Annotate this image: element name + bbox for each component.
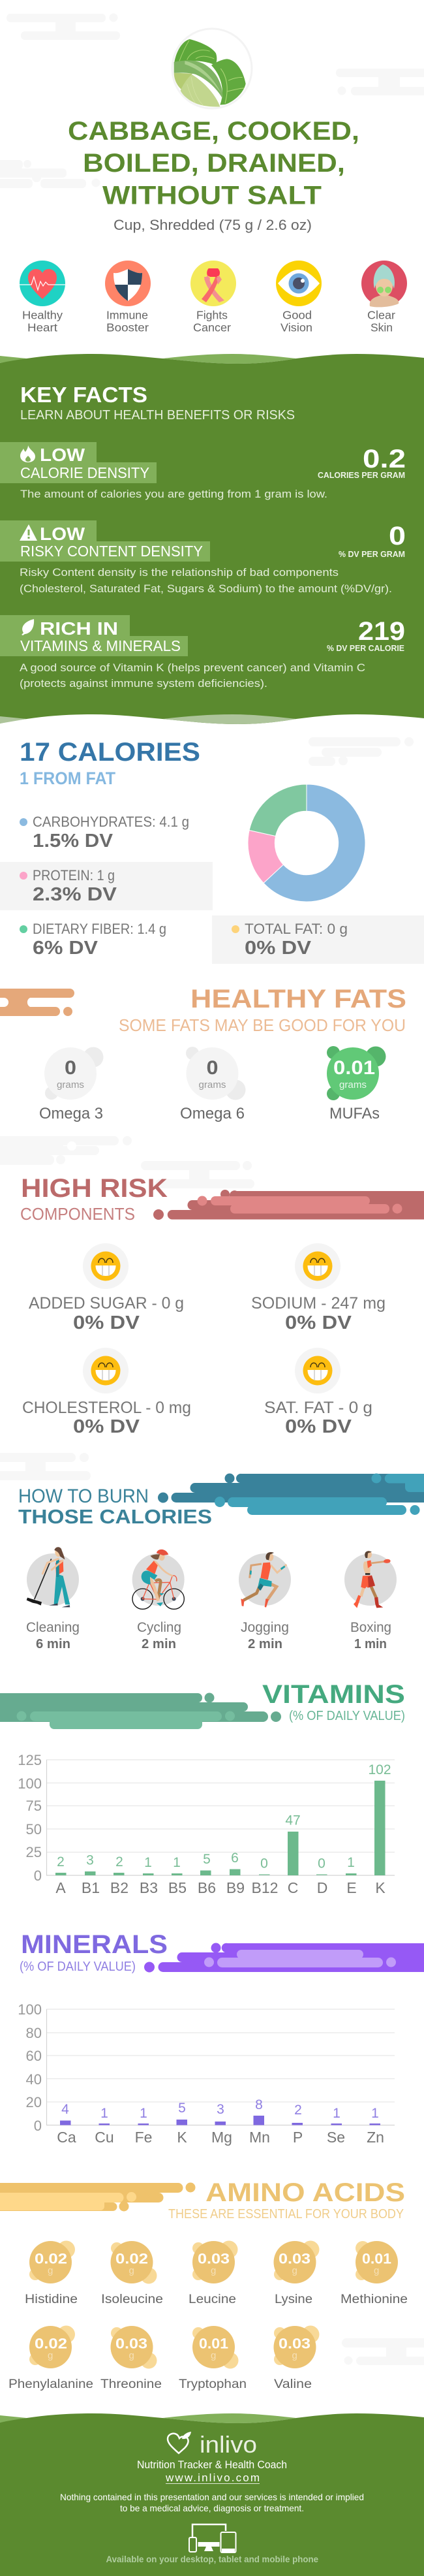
subheading: SOME FATS MAY BE GOOD FOR YOU xyxy=(119,1015,406,1035)
panel: footer xyxy=(0,2413,424,2576)
amino: phenylalanine: g xyxy=(48,2350,53,2361)
header decoration xyxy=(0,2182,196,2211)
bar chart: minerals: 1 xyxy=(333,2106,341,2121)
header decoration xyxy=(0,1693,281,1729)
benefit: fights cancer xyxy=(190,261,236,334)
bar chart: vitamins: 1 xyxy=(144,1855,152,1870)
heading: MINERALS xyxy=(21,1930,168,1959)
fact: risky content density: Risky Content density is the relationship of bad components xyxy=(20,566,339,579)
panel: minerals xyxy=(18,1930,424,2146)
fact: rich in vitamins and minerals: (protects against immune system deficiencies). xyxy=(20,677,267,690)
exercise: cleaning: Cleaning xyxy=(26,1620,80,1635)
fact: rich in vitamins and minerals: VITAMINS & MINERALS xyxy=(20,637,181,654)
background cloud: top right xyxy=(336,69,424,95)
row: dietary fiber xyxy=(20,921,166,959)
cabbage inner heart xyxy=(174,73,192,89)
background cloud: high risk right xyxy=(141,1161,254,1188)
fact: calorie density: CALORIES PER GRAM xyxy=(318,470,405,480)
exercise: cycling xyxy=(132,1550,185,1651)
background cloud: calories xyxy=(309,737,414,766)
bar chart: vitamins: 2 xyxy=(57,1854,65,1869)
header decoration xyxy=(153,1190,424,1220)
subheading: THESE ARE ESSENTIAL FOR YOUR BODY xyxy=(168,2207,404,2221)
bar chart: minerals: 20 xyxy=(26,2094,42,2110)
fact: calorie density xyxy=(0,442,406,500)
bar chart: minerals: 3 xyxy=(217,2102,224,2117)
amino: leucine: Leucine xyxy=(189,2293,236,2306)
heading: HOW TO BURN xyxy=(18,1486,149,1507)
amino: valine: 0.03 xyxy=(279,2335,310,2352)
amino: leucine: g xyxy=(211,2265,216,2276)
fact: rich in vitamins and minerals xyxy=(0,615,405,690)
fact: calorie density: LOW xyxy=(40,445,85,465)
benefit: good vision: Vision xyxy=(280,321,312,334)
bar chart: vitamins: K xyxy=(375,1879,386,1896)
amino: valine: Valine xyxy=(274,2377,312,2391)
bar chart: minerals: 80 xyxy=(26,2025,42,2041)
bar chart: vitamins: 6 xyxy=(231,1851,239,1866)
benefit: good vision: Good xyxy=(282,308,312,321)
row: total fat: TOTAL FAT: 0 g xyxy=(245,921,348,937)
amino: isoleucine: g xyxy=(129,2265,134,2276)
benefit: immune booster: Immune xyxy=(106,308,148,321)
exercise: boxing: Boxing xyxy=(350,1620,391,1635)
amino: valine: g xyxy=(292,2350,297,2361)
bar chart: minerals: 1 xyxy=(100,2106,108,2121)
amino: tryptophan: 0.01 xyxy=(199,2335,228,2352)
fat: MUFAs: grams xyxy=(339,1079,367,1090)
bar chart: minerals: Mn xyxy=(249,2129,270,2146)
component: added sugar xyxy=(29,1243,184,1333)
subheading: 1 FROM FAT xyxy=(20,769,115,788)
fat: omega 6: grams xyxy=(198,1079,226,1090)
amino: histidine: 0.02 xyxy=(35,2250,67,2267)
bar chart: minerals: 0 xyxy=(34,2118,42,2134)
bar chart: minerals: 60 xyxy=(26,2048,42,2064)
fat: MUFAs: 0.01 xyxy=(333,1057,375,1079)
component: cholesterol xyxy=(22,1348,191,1437)
benefit: good vision xyxy=(276,261,322,334)
fat: omega 6: 0 xyxy=(206,1057,218,1079)
background cloud: amino right xyxy=(342,2338,424,2365)
background cloud: burn section xyxy=(0,1453,91,1480)
fat: MUFAs xyxy=(327,1046,386,1122)
amino: valine xyxy=(274,2326,320,2391)
benefit: clear skin: Skin xyxy=(371,321,393,334)
benefit: clear skin: Clear xyxy=(367,308,395,321)
row: dietary fiber: 6% DV xyxy=(33,938,98,959)
cabbage right leaf xyxy=(211,59,246,105)
fat: omega 6: Omega 6 xyxy=(180,1105,245,1122)
fact: risky content density: RISKY CONTENT DENSITY xyxy=(20,543,203,560)
header decoration xyxy=(158,1473,424,1515)
bar chart: minerals: Mg xyxy=(211,2129,232,2146)
amino: histidine: g xyxy=(48,2265,53,2276)
fact: risky content density: 0 xyxy=(389,522,406,550)
header decoration xyxy=(0,989,74,1016)
heading: HEALTHY FATS xyxy=(190,985,406,1013)
panel background with waves xyxy=(0,354,424,727)
benefit: fights cancer: Cancer xyxy=(193,321,231,334)
benefit: healthy heart: Healthy xyxy=(22,308,63,321)
amino: methionine: 0.01 xyxy=(362,2250,391,2267)
amino: threonine: Threonine xyxy=(100,2377,162,2391)
component: cholesterol: CHOLESTEROL - 0 mg xyxy=(22,1399,191,1417)
fat: omega 3: 0 xyxy=(65,1057,76,1079)
fact: risky content density: % DV PER GRAM xyxy=(339,549,405,559)
bar chart: vitamins: 2 xyxy=(115,1854,123,1869)
fat: omega 3: Omega 3 xyxy=(39,1105,103,1122)
background cloud: top left xyxy=(7,13,120,40)
fact: risky content density xyxy=(0,520,406,595)
fat: omega 3 xyxy=(39,1047,103,1122)
fat: omega 6 xyxy=(180,1047,245,1122)
bar chart: minerals: Fe xyxy=(135,2129,152,2146)
bar chart: vitamins: 3 xyxy=(86,1853,94,1868)
bar chart: vitamins: 25 xyxy=(26,1844,42,1860)
component: sodium xyxy=(251,1243,386,1333)
amino: tryptophan: g xyxy=(211,2350,216,2361)
amino: leucine: 0.03 xyxy=(198,2250,230,2267)
component: saturated fat: SAT. FAT - 0 g xyxy=(264,1399,372,1417)
component: added sugar: ADDED SUGAR - 0 g xyxy=(29,1294,184,1312)
bar chart: vitamins: 125 xyxy=(18,1752,42,1768)
bar chart: vitamins: D xyxy=(317,1879,327,1896)
amino: threonine: 0.03 xyxy=(115,2335,147,2352)
bar chart: vitamins: B12 xyxy=(252,1879,278,1896)
tagline: Nutrition Tracker & Health Coach xyxy=(137,2458,287,2471)
title: WITHOUT SALT xyxy=(102,182,322,210)
amino: isoleucine: Isoleucine xyxy=(101,2293,163,2306)
logo: inlivo: inlivo xyxy=(200,2431,257,2458)
bar chart: vitamins: 1 xyxy=(173,1855,181,1870)
exercise: jogging xyxy=(239,1552,291,1651)
footer background with waves xyxy=(0,2413,424,2576)
fat: MUFAs: MUFAs xyxy=(329,1105,380,1122)
amino: threonine xyxy=(100,2326,162,2391)
serving size: Cup, Shredded (75 g / 2.6 oz) xyxy=(114,217,312,233)
header decoration xyxy=(144,1943,424,1972)
fact: rich in vitamins and minerals: A good source of Vitamin K (helps prevent cancer) and Vitamin C xyxy=(20,661,365,674)
bar chart: minerals: 8 xyxy=(255,2097,263,2112)
amino: threonine: g xyxy=(129,2350,134,2361)
amino: lysine: Lysine xyxy=(275,2293,312,2306)
bar chart: minerals: K xyxy=(177,2129,187,2146)
row: carbohydrates: CARBOHYDRATES: 4.1 g xyxy=(33,814,189,830)
subheading: (% OF DAILY VALUE) xyxy=(289,1709,405,1723)
fact: calorie density: CALORIE DENSITY xyxy=(20,464,149,481)
exercise: boxing: 1 min xyxy=(354,1637,387,1651)
cabbage lower leaf xyxy=(181,74,220,106)
bar chart: vitamins: 0 xyxy=(34,1868,42,1884)
amino: phenylalanine: 0.02 xyxy=(35,2335,67,2352)
component: added sugar: 0% DV xyxy=(73,1312,140,1333)
bar chart: minerals: P xyxy=(293,2129,303,2146)
background cloud: high risk left xyxy=(0,1136,132,1165)
bar chart: minerals: 1 xyxy=(140,2106,147,2121)
bar chart: vitamins: 102 xyxy=(368,1762,391,1777)
exercise: boxing xyxy=(344,1551,397,1651)
component: saturated fat: 0% DV xyxy=(285,1416,352,1437)
panel: healthy fats xyxy=(0,985,406,1122)
amino: phenylalanine xyxy=(8,2326,93,2391)
bar chart: vitamins: 100 xyxy=(18,1775,42,1792)
title: CABBAGE, COOKED, xyxy=(68,117,359,146)
website link: www.inlivo.com xyxy=(165,2472,260,2484)
icon: warning triangle xyxy=(20,524,37,541)
panel: vitamins xyxy=(0,1680,405,1896)
amino: methionine xyxy=(341,2241,408,2306)
fat: omega 3: grams xyxy=(57,1079,84,1090)
fact: rich in vitamins and minerals: 219 xyxy=(358,617,405,646)
amino: methionine: g xyxy=(374,2265,379,2276)
amino: tryptophan xyxy=(179,2326,247,2391)
bar chart: minerals: 4 xyxy=(61,2102,69,2117)
row: carbohydrates: 1.5% DV xyxy=(33,831,114,851)
amino: lysine: 0.03 xyxy=(279,2250,310,2267)
bar chart: vitamins: B2 xyxy=(110,1879,129,1896)
disclaimer: to be a medical advice, diagnosis or treatment. xyxy=(120,2503,304,2513)
bar chart: minerals: 5 xyxy=(178,2101,186,2116)
bar chart: vitamins: B6 xyxy=(198,1879,216,1896)
background cloud: title left xyxy=(0,160,100,188)
amino: lysine: g xyxy=(292,2265,297,2276)
bar chart: vitamins: 50 xyxy=(26,1821,42,1837)
amino: histidine: Histidine xyxy=(25,2293,78,2306)
bar chart: minerals: Zn xyxy=(367,2129,384,2146)
fact: risky content density: LOW xyxy=(40,524,85,544)
heading: HIGH RISK xyxy=(21,1174,168,1203)
fact: calorie density: 0.2 xyxy=(363,445,406,473)
benefit: immune booster: Booster xyxy=(106,321,149,334)
icon: devices xyxy=(189,2524,236,2552)
row: dietary fiber: DIETARY FIBER: 1.4 g xyxy=(33,921,166,937)
bar chart: minerals: 100 xyxy=(18,2001,42,2018)
row: carbohydrates xyxy=(20,814,189,851)
bar chart: minerals: Ca xyxy=(57,2129,76,2146)
amino: isoleucine xyxy=(101,2241,163,2306)
amino: isoleucine: 0.02 xyxy=(115,2250,148,2267)
bar chart: vitamins: B9 xyxy=(226,1879,245,1896)
row: total fat xyxy=(212,915,424,964)
row: protein: 2.3% DV xyxy=(33,884,117,905)
bar chart: vitamins: 0 xyxy=(318,1856,326,1871)
logo: inlivo xyxy=(168,2431,257,2458)
bar chart: vitamins: 47 xyxy=(285,1813,301,1828)
bar chart: vitamins: 75 xyxy=(26,1798,42,1814)
bar chart: minerals xyxy=(18,2001,395,2146)
bar chart: vitamins: B1 xyxy=(82,1879,100,1896)
heading: KEY FACTS xyxy=(20,383,147,407)
exercise: jogging: 2 min xyxy=(248,1637,282,1651)
row: protein xyxy=(0,862,213,910)
bar chart: minerals: 40 xyxy=(26,2071,42,2088)
exercise: cleaning xyxy=(26,1547,80,1651)
fact: rich in vitamins and minerals: RICH IN xyxy=(40,618,118,639)
title: BOILED, DRAINED, xyxy=(83,149,345,178)
icon: leaf xyxy=(22,619,34,635)
title xyxy=(68,117,359,210)
panel: high risk components xyxy=(20,1174,424,1437)
row: total fat: 0% DV xyxy=(245,938,312,959)
fact: calorie density: The amount of calories you are getting from 1 gram is low. xyxy=(20,488,327,500)
heading: 17 CALORIES xyxy=(20,738,200,767)
bar chart: vitamins: 0 xyxy=(260,1856,268,1871)
amino: phenylalanine: Phenylalanine xyxy=(8,2377,93,2391)
panel: calories xyxy=(0,738,424,964)
subheading: (% OF DAILY VALUE) xyxy=(20,1960,136,1974)
panel: key facts xyxy=(0,354,424,727)
row: protein: PROTEIN: 1 g xyxy=(33,867,115,883)
icon: flame xyxy=(20,445,35,462)
bar chart: vitamins: C xyxy=(288,1879,298,1896)
disclaimer: Nothing contained in this presentation and our services is intended or implied xyxy=(60,2492,364,2502)
panel: how to burn those calories xyxy=(18,1473,424,1651)
bar chart: vitamins xyxy=(18,1752,395,1896)
fact: risky content density: (Cholesterol, Saturated Fat, Sugars & Sodium) to the amount (%DV/gr). xyxy=(20,582,392,595)
amino: histidine xyxy=(25,2241,78,2306)
amino: lysine xyxy=(274,2241,320,2306)
cabbage top leaf xyxy=(174,39,217,65)
bar chart: minerals: Se xyxy=(327,2129,345,2146)
bar chart: vitamins: E xyxy=(346,1879,357,1896)
subheading: COMPONENTS xyxy=(20,1204,135,1224)
panel: amino acids xyxy=(0,2178,408,2391)
bar chart: vitamins: B3 xyxy=(140,1879,158,1896)
panel: how to burn those calories: THOSE CALORIES xyxy=(18,1505,212,1528)
component: saturated fat xyxy=(264,1348,372,1437)
fact: rich in vitamins and minerals: % DV PER CALORIE xyxy=(327,643,404,653)
benefit: healthy heart xyxy=(20,261,65,334)
bar chart: minerals: Cu xyxy=(95,2129,114,2146)
amino: leucine xyxy=(189,2241,237,2306)
amino: methionine: Methionine xyxy=(341,2293,408,2306)
exercise: cycling: Cycling xyxy=(137,1620,181,1635)
benefit: healthy heart: Heart xyxy=(27,321,57,334)
bar chart: vitamins: B5 xyxy=(168,1879,187,1896)
benefit: fights cancer: Fights xyxy=(196,308,228,321)
component: sodium: 0% DV xyxy=(285,1312,352,1333)
exercise: cleaning: 6 min xyxy=(36,1637,70,1651)
amino: tryptophan: Tryptophan xyxy=(179,2377,247,2391)
heading: VITAMINS xyxy=(262,1680,405,1709)
component: cholesterol: 0% DV xyxy=(73,1416,140,1437)
heading xyxy=(20,383,295,422)
benefit: immune booster xyxy=(105,261,151,334)
bar chart: minerals: 2 xyxy=(294,2103,302,2118)
bar chart: vitamins: 1 xyxy=(347,1855,355,1870)
availability note: Available on your desktop, tablet and mobile phone xyxy=(106,2554,318,2564)
bar chart: minerals: 1 xyxy=(371,2106,379,2121)
heading: AMINO ACIDS xyxy=(205,2178,405,2207)
heading: LEARN ABOUT HEALTH BENEFITS OR RISKS xyxy=(20,408,295,422)
cabbage image xyxy=(172,29,252,108)
bar chart: vitamins: 5 xyxy=(203,1852,211,1867)
disclaimer xyxy=(60,2492,364,2513)
exercise: cycling: 2 min xyxy=(142,1637,176,1651)
benefit: clear skin xyxy=(361,261,407,334)
bar chart: vitamins: A xyxy=(55,1879,66,1896)
component: sodium: SODIUM - 247 mg xyxy=(251,1294,386,1312)
donut chart xyxy=(248,784,365,902)
cabbage middle leaf xyxy=(174,61,223,99)
exercise: jogging: Jogging xyxy=(241,1620,289,1635)
